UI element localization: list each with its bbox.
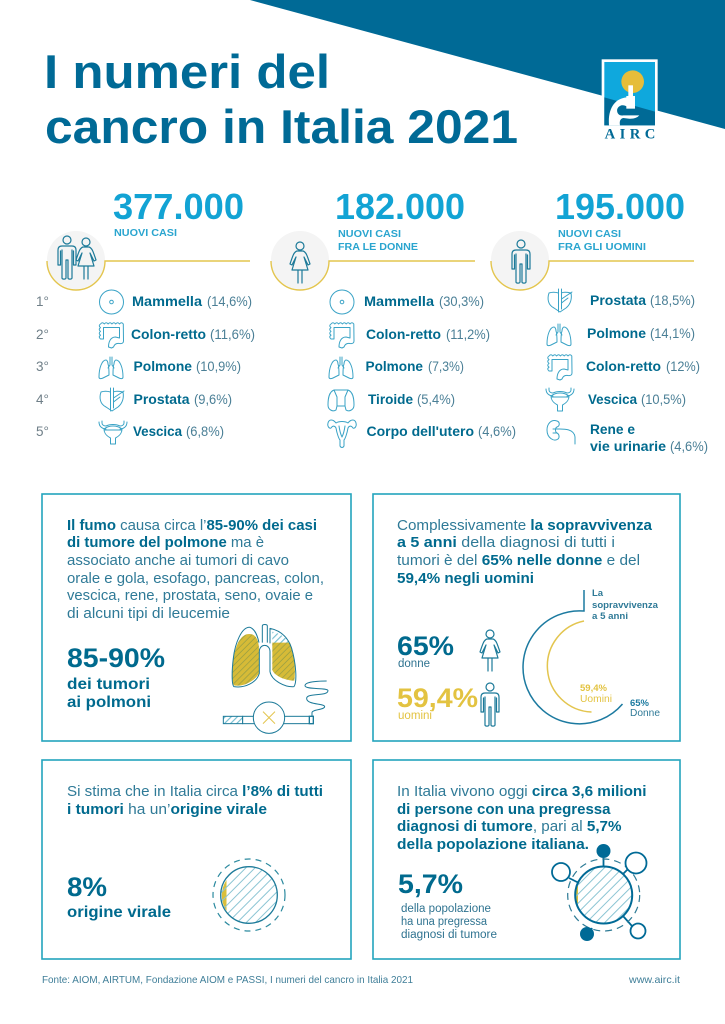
- prevalence statistic: diagnosi di tumore: [401, 929, 497, 941]
- ranking: all cases: (9,6%): [194, 392, 232, 407]
- ranking: women: (7,3%): [428, 359, 464, 374]
- column 2 header: women: [271, 186, 475, 290]
- ranking: men: Prostata: [590, 293, 646, 308]
- rank labels: 1°: [36, 294, 49, 309]
- ranking: men: (14,1%): [650, 326, 695, 341]
- survival text: a 5 anni della diagnosi di tutti i: [397, 535, 615, 551]
- ranking: women: (5,4%): [417, 392, 455, 407]
- smoking statistic: [67, 643, 165, 711]
- ranking: women: Colon-retto: [366, 327, 441, 342]
- ranking: men: (18,5%): [650, 293, 695, 308]
- ranking: men: Polmone: [587, 326, 646, 341]
- survival arc chart: Donne: [630, 708, 660, 719]
- smoking statistic: 85-90%: [67, 643, 165, 673]
- prevalence text: diagnosi di tumore, pari al 5,7%: [397, 819, 622, 835]
- survival arc chart: 59,4%: [580, 683, 608, 694]
- panel: smoking: [42, 494, 351, 741]
- ranking: women: (4,6%): [478, 424, 516, 439]
- smoking text: vescica, rene, prostata, seno, ovaie e: [67, 588, 313, 604]
- column 3 header: men: FRA GLI UOMINI: [558, 241, 646, 253]
- title: [44, 45, 518, 153]
- prevalence text: In Italia vivono oggi circa 3,6 milioni: [397, 784, 646, 800]
- viral text: [67, 784, 323, 818]
- smoking text: orale e gola, esofago, pancreas, colon,: [67, 571, 324, 587]
- ranking: women: Polmone: [366, 359, 423, 374]
- ranking: men: vie urinarie: [590, 439, 667, 454]
- survival arc chart: La: [592, 588, 604, 599]
- column 3 header: men: NUOVI CASI: [558, 228, 621, 240]
- prevalence text: di persone con una pregressa: [397, 802, 611, 818]
- ranking: men: [546, 289, 708, 454]
- rank labels: 5°: [36, 424, 49, 439]
- prevalence text: [397, 784, 646, 853]
- icon: circle with nodes: [552, 844, 646, 941]
- icon: hatched circle: [213, 859, 285, 931]
- title: cancro in Italia 2021: [45, 100, 518, 153]
- icon: lungs and cigarette: [223, 624, 328, 733]
- AIRC logo: [602, 59, 658, 142]
- ranking: men: (4,6%): [670, 439, 708, 454]
- viral statistic: [67, 872, 171, 921]
- panel: people living with diagnosis: [373, 760, 680, 959]
- ranking: men: (10,5%): [641, 392, 686, 407]
- top corner triangle: [250, 0, 725, 129]
- smoking text: associato anche ai tumori di cavo: [67, 553, 289, 569]
- men statistic: 59,4%: [397, 683, 478, 713]
- column 3 header: men: 195.000: [555, 186, 685, 227]
- ranking: all cases: Vescica: [133, 424, 182, 439]
- survival text: Complessivamente la sopravvivenza: [397, 518, 653, 534]
- AIRC logo: AIRC: [605, 126, 655, 142]
- column 2 header: women: FRA LE DONNE: [338, 241, 418, 253]
- survival text: 59,4% negli uomini: [397, 571, 534, 587]
- ranking: all cases: [99, 290, 255, 444]
- prevalence statistic: [398, 869, 497, 941]
- ranking: all cases: Mammella: [132, 294, 203, 309]
- survival arc chart: sopravvivenza: [592, 600, 659, 611]
- women statistic: [397, 630, 500, 671]
- women statistic: donne: [398, 658, 430, 670]
- smoking statistic: ai polmoni: [67, 694, 151, 711]
- ranking: men: (12%): [666, 359, 700, 374]
- survival arc chart: Uomini: [580, 694, 612, 705]
- smoking statistic: dei tumori: [67, 676, 150, 693]
- prevalence statistic: 5,7%: [398, 869, 463, 899]
- footer website: www.airc.it: [628, 974, 680, 986]
- viral text: Si stima che in Italia circa l’8% di tutti: [67, 784, 323, 800]
- ranking: all cases: Colon-retto: [131, 327, 206, 342]
- ranking: women: Tiroide: [368, 392, 413, 407]
- ranking: men: Colon-retto: [586, 359, 661, 374]
- survival arc chart: 65%: [630, 698, 650, 709]
- ranking: all cases: (10,9%): [196, 359, 241, 374]
- column 3 header: men: [491, 186, 694, 290]
- rank labels: 4°: [36, 392, 49, 407]
- column 2 header: women: 182.000: [335, 186, 465, 227]
- ranking: women: [328, 290, 516, 448]
- prevalence statistic: ha una pregressa: [401, 916, 488, 928]
- title: I numeri del: [44, 45, 330, 98]
- ranking: all cases: Prostata: [134, 392, 190, 407]
- column 1 header: total new cases: 377.000: [113, 186, 244, 227]
- ranking: all cases: (14,6%): [207, 294, 252, 309]
- viral statistic: 8%: [67, 872, 107, 902]
- column 1 header: total new cases: NUOVI CASI: [114, 227, 177, 239]
- smoking text: [67, 518, 324, 622]
- ranking: women: Mammella: [364, 294, 435, 309]
- men statistic: [397, 683, 499, 726]
- footer source: Fonte: AIOM, AIRTUM, Fondazione AIOM e PASSI, I numeri del cancro in Italia 2021: [42, 974, 413, 986]
- survival text: tumori è del 65% nelle donne e del: [397, 553, 640, 569]
- survival arc chart: a 5 anni: [592, 611, 628, 622]
- prevalence statistic: della popolazione: [401, 903, 491, 915]
- panel: survival: [373, 494, 680, 741]
- ranking: women: Corpo dell'utero: [366, 424, 474, 439]
- ranking: women: (11,2%): [446, 327, 490, 342]
- men statistic: uomini: [398, 710, 432, 722]
- ranking: all cases: Polmone: [134, 359, 192, 374]
- rank labels: 2°: [36, 327, 49, 342]
- ranking: all cases: (11,6%): [210, 327, 255, 342]
- prevalence text: della popolazione italiana.: [397, 837, 589, 853]
- ranking: men: Vescica: [588, 392, 637, 407]
- rank labels: 3°: [36, 359, 49, 374]
- column 2 header: women: NUOVI CASI: [338, 228, 401, 240]
- smoking text: di alcuni tipi di leucemie: [67, 606, 230, 622]
- women statistic: 65%: [397, 631, 454, 661]
- panel: viral origin: [42, 760, 351, 959]
- survival arc chart: [523, 588, 660, 724]
- survival text: [397, 518, 653, 587]
- column 1 header: total new cases: [47, 186, 250, 290]
- smoking text: Il fumo causa circa l’85-90% dei casi: [67, 518, 317, 534]
- smoking text: di tumore del polmone ma è: [67, 535, 264, 551]
- rank labels: [36, 294, 49, 439]
- viral statistic: origine virale: [67, 904, 171, 921]
- ranking: all cases: (6,8%): [186, 424, 224, 439]
- ranking: men: Rene e: [590, 422, 635, 437]
- viral text: i tumori ha un’origine virale: [67, 802, 267, 818]
- ranking: women: (30,3%): [439, 294, 484, 309]
